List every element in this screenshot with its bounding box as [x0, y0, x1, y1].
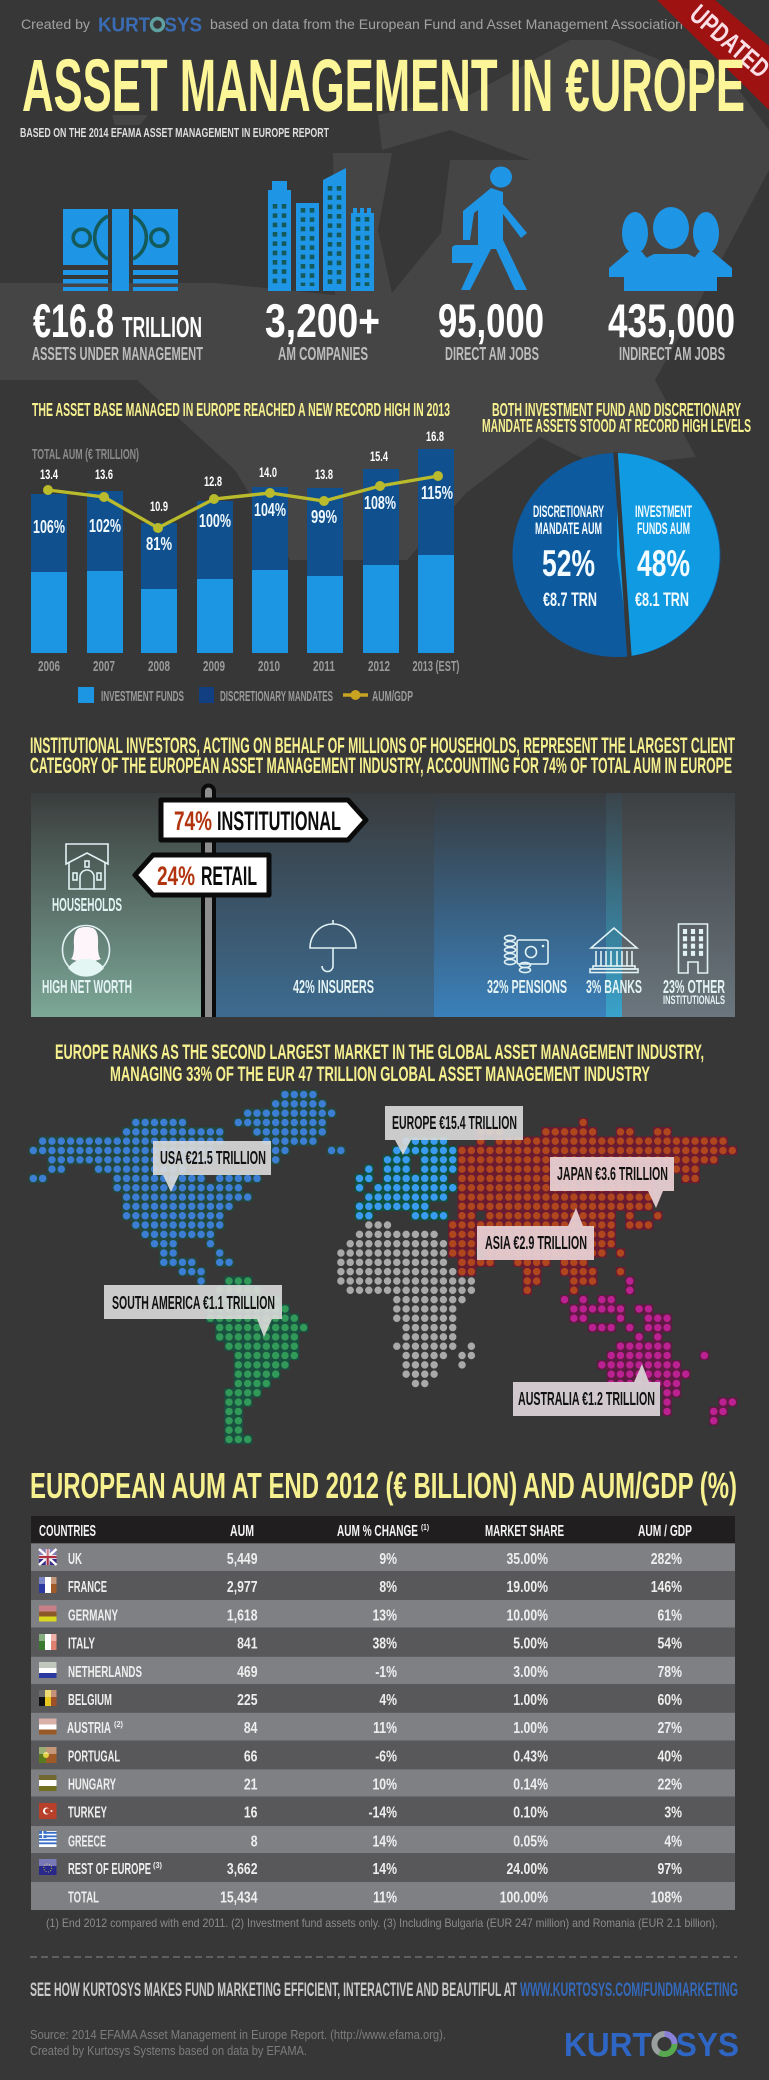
value labels: 16.8 — [426, 428, 444, 444]
top credit line: Created by — [21, 17, 90, 32]
column: market share: 1.00% — [513, 1691, 549, 1708]
sign: retail: 24% — [157, 861, 195, 891]
country names: REST OF EUROPE — [68, 1861, 151, 1878]
AUM/GDP percentages: 115% — [421, 483, 453, 503]
callout: Australia: AUSTRALIA €1.2 TRILLION — [518, 1389, 655, 1409]
AUM/GDP percentages: 108% — [364, 493, 396, 513]
column: AUM % change: 13% — [373, 1606, 398, 1624]
callout: South America — [104, 1285, 282, 1337]
column: AUM % change: -14% — [368, 1803, 398, 1821]
table header: MARKET SHARE — [485, 1523, 564, 1540]
callout: South America: SOUTH AMERICA €1.1 TRILLION — [112, 1293, 275, 1313]
column: market share: 0.43% — [513, 1747, 549, 1765]
label: other institutionals: INSTITUTIONALS — [663, 993, 725, 1007]
country names: FRANCE — [68, 1579, 107, 1596]
heading: record high: THE ASSET BASE MANAGED IN EUROPE REACHED A NEW RECORD HIGH IN 2013 — [32, 400, 450, 420]
legend — [78, 687, 413, 705]
icon: office tower — [678, 924, 708, 973]
column: AUM / GDP: 3% — [664, 1803, 683, 1821]
AUM/GDP percentages: 100% — [199, 511, 231, 531]
year axis: 2011 — [313, 658, 335, 675]
callout: Japan — [550, 1157, 674, 1208]
stat: indirect jobs — [608, 207, 735, 364]
column: AUM: 841 — [237, 1634, 258, 1652]
value labels: 12.8 — [204, 473, 222, 489]
AUM/GDP percentages — [33, 483, 453, 554]
slice label: investment funds: FUNDS AUM — [637, 520, 690, 538]
column: AUM: 1,618 — [227, 1606, 258, 1624]
heading: institutional investors — [30, 733, 735, 778]
column: market share: 1.00% — [513, 1719, 549, 1736]
value labels: 13.6 — [95, 466, 113, 482]
top credit line: based on data from the European Fund and Asset Management Association — [210, 17, 683, 32]
column: market share: 19.00% — [507, 1578, 549, 1595]
subtitle: BASED ON THE 2014 EFAMA ASSET MANAGEMENT IN EUROPE REPORT — [20, 125, 329, 140]
stat: assets under management: €16.8 — [33, 294, 114, 347]
column: AUM: 3,662 — [227, 1860, 258, 1877]
country names: ITALY — [68, 1636, 95, 1652]
country names: BELGIUM — [68, 1692, 112, 1709]
column: AUM: 2,977 — [227, 1578, 258, 1595]
column: AUM: 16 — [244, 1803, 258, 1821]
country names: (2) — [114, 1720, 123, 1729]
stat: assets under management: ASSETS UNDER MANAGEMENT — [32, 344, 203, 364]
label: banks: 3% BANKS — [586, 977, 642, 997]
sign: institutional: INSTITUTIONAL — [217, 806, 341, 836]
column: market share: 0.10% — [513, 1803, 549, 1821]
column: AUM: 8 — [251, 1832, 258, 1850]
slice label: investment funds: 48% — [637, 543, 690, 584]
flag: Europe — [39, 1859, 56, 1875]
background map of Europe — [0, 40, 769, 560]
column: AUM / GDP: 22% — [658, 1775, 683, 1793]
column: AUM % change: -6% — [375, 1747, 398, 1765]
column: AUM % change: 14% — [373, 1860, 398, 1877]
column: market share: 0.05% — [513, 1832, 549, 1850]
flag: Italy — [39, 1634, 56, 1650]
pie chart: mandates vs funds — [512, 452, 720, 658]
icon: pensions — [504, 935, 548, 973]
slice label: discretionary: 52% — [542, 543, 595, 584]
logo: Kurtosys large: KURTOSYS — [564, 2026, 739, 2063]
source — [30, 2028, 446, 2058]
heading: both assets — [482, 400, 751, 436]
column: market share: 10.00% — [507, 1606, 549, 1624]
country names: PORTUGAL — [68, 1748, 120, 1766]
column: AUM: 469 — [237, 1663, 258, 1680]
sign: retail: RETAIL — [201, 861, 257, 891]
callout: Europe: EUROPE €15.4 TRILLION — [392, 1113, 517, 1133]
column: AUM / GDP: 61% — [658, 1606, 683, 1624]
column: AUM % change: 10% — [373, 1775, 398, 1793]
flag: Portugal — [39, 1747, 56, 1763]
column: AUM / GDP: 78% — [658, 1663, 683, 1680]
year axis: 2007 — [93, 658, 115, 675]
table header: AUM % CHANGE — [337, 1523, 418, 1540]
value labels: 13.8 — [315, 466, 333, 482]
column: AUM / GDP: 97% — [658, 1860, 683, 1877]
AUM/GDP percentages: 81% — [146, 534, 172, 554]
year axis: 2006 — [38, 658, 60, 675]
icon: walking person with briefcase — [452, 166, 527, 290]
stat: AM companies: 3,200+ — [265, 294, 380, 347]
column: AUM: 21 — [244, 1775, 258, 1793]
country names: NETHERLANDS — [68, 1664, 142, 1681]
column: AUM % change: -1% — [375, 1663, 398, 1680]
value labels: 13.4 — [40, 466, 58, 482]
slice label: investment funds — [635, 503, 692, 611]
flag: Turkey — [39, 1803, 56, 1819]
year axis — [38, 658, 460, 675]
country names: UK — [68, 1551, 83, 1568]
column: market share: 0.14% — [513, 1775, 549, 1793]
column: AUM % change: 9% — [379, 1550, 398, 1567]
table row backgrounds — [31, 1543, 735, 1910]
column: AUM: 15,434 — [220, 1888, 258, 1906]
icon: high net worth person — [62, 926, 110, 977]
column: AUM: 5,449 — [227, 1550, 258, 1567]
slice label: discretionary: DISCRETIONARY — [533, 503, 604, 521]
label: other institutionals — [663, 977, 725, 1007]
flag: Netherlands — [39, 1662, 56, 1678]
column: AUM: 225 — [237, 1691, 258, 1708]
stat: direct jobs: 95,000 — [438, 294, 544, 347]
source: Created by Kurtosys Systems based on data by EFAMA. — [30, 2044, 307, 2058]
panel: client categories — [31, 784, 735, 1017]
flag: Belgium — [39, 1690, 56, 1706]
country names: GREECE — [68, 1834, 106, 1850]
slice label: investment funds: €8.1 TRN — [635, 590, 689, 611]
table header — [31, 1516, 735, 1544]
column: AUM / GDP: 4% — [664, 1832, 683, 1850]
column: AUM % change — [368, 1550, 398, 1906]
flag: France — [39, 1577, 56, 1593]
signpost pole — [201, 784, 216, 1017]
column: market share: 3.00% — [513, 1663, 549, 1680]
column: AUM % change: 38% — [373, 1634, 398, 1652]
country names: TURKEY — [68, 1804, 107, 1822]
country names: TOTAL — [68, 1890, 99, 1906]
slice label: investment funds: INVESTMENT — [635, 503, 692, 521]
column: AUM / GDP: 54% — [658, 1634, 683, 1652]
table header: AUM — [230, 1523, 254, 1540]
column: AUM / GDP — [651, 1550, 683, 1906]
stat: AM companies — [265, 168, 380, 364]
bars: investment funds — [31, 555, 454, 653]
top credit line — [21, 14, 683, 36]
dots — [33, 1095, 732, 1439]
stat: direct jobs: DIRECT AM JOBS — [445, 344, 539, 364]
label: households: HOUSEHOLDS — [52, 895, 122, 915]
year axis: 2013 (EST) — [412, 658, 460, 675]
column: AUM / GDP: 146% — [651, 1578, 683, 1595]
sign: institutional — [161, 800, 366, 840]
callout: USA — [153, 1141, 271, 1192]
AUM/GDP percentages: 102% — [89, 516, 121, 536]
icon: house — [66, 844, 108, 889]
callout: Europe — [385, 1106, 523, 1155]
column: AUM / GDP: 40% — [658, 1747, 683, 1765]
bar chart: total AUM — [31, 428, 460, 705]
sign: institutional: 74% — [174, 806, 212, 836]
flag: Austria — [39, 1718, 56, 1734]
column: market share: 24.00% — [507, 1860, 549, 1877]
region tint blocks — [33, 1095, 732, 1439]
column: AUM % change: 14% — [373, 1832, 398, 1850]
column: AUM / GDP: 108% — [651, 1888, 683, 1906]
column: AUM % change: 11% — [373, 1719, 398, 1736]
flag: UK — [39, 1549, 56, 1565]
column: AUM / GDP: 27% — [658, 1719, 683, 1736]
slice label: discretionary: €8.7 TRN — [543, 590, 597, 611]
bars: discretionary mandates — [31, 449, 454, 589]
value labels: 15.4 — [370, 448, 388, 464]
source: Source: 2014 EFAMA Asset Management in Europe Report. (http://www.efama.org). — [30, 2028, 446, 2042]
country names — [67, 1551, 162, 1906]
column: market share: 5.00% — [513, 1634, 549, 1652]
stat: AM companies: AM COMPANIES — [278, 344, 368, 364]
icon: umbrella — [310, 920, 356, 972]
table header: COUNTRIES — [39, 1523, 96, 1540]
year axis: 2010 — [258, 658, 280, 675]
stat: direct jobs — [438, 166, 544, 364]
column: AUM: 84 — [244, 1719, 258, 1736]
AUM/GDP line — [43, 471, 443, 533]
column: market share: 35.00% — [507, 1550, 549, 1567]
table: European AUM — [31, 1516, 735, 1910]
label: insurers: 42% INSURERS — [293, 977, 374, 997]
column: AUM % change: 11% — [373, 1888, 398, 1906]
legend: DISCRETIONARY MANDATES — [220, 688, 333, 705]
column: AUM: 66 — [244, 1747, 258, 1765]
country names: GERMANY — [68, 1608, 118, 1624]
column: AUM / GDP: 60% — [658, 1691, 683, 1708]
AUM/GDP percentages: 104% — [254, 500, 286, 520]
label: high net worth: HIGH NET WORTH — [42, 977, 132, 997]
year axis: 2008 — [148, 658, 170, 675]
callout: Asia — [477, 1208, 594, 1260]
flag: Greece — [39, 1831, 56, 1847]
label: pensions: 32% PENSIONS — [487, 977, 567, 997]
year axis: 2012 — [368, 658, 390, 675]
column: market share: 100.00% — [500, 1888, 549, 1906]
AUM/GDP percentages: 106% — [33, 517, 65, 537]
legend: AUM/GDP — [372, 688, 413, 705]
country names: (3) — [153, 1861, 162, 1870]
icon: buildings — [268, 168, 374, 291]
callout: Australia — [513, 1364, 660, 1416]
table header: (1) — [421, 1523, 429, 1532]
country names: HUNGARY — [68, 1776, 116, 1794]
value labels: 14.0 — [259, 464, 277, 480]
year axis: 2009 — [203, 658, 225, 675]
column: AUM — [220, 1550, 258, 1906]
callout: USA: USA €21.5 TRILLION — [160, 1148, 266, 1168]
logo: Kurtosys small: KURTOSYS — [98, 14, 202, 36]
dot world map — [33, 1095, 732, 1439]
icon: bank — [590, 928, 638, 972]
table header: AUM / GDP — [638, 1523, 692, 1540]
stat: assets under management — [32, 209, 203, 364]
slice label: discretionary — [533, 503, 604, 611]
sign: retail — [135, 855, 269, 895]
country names: AUSTRIA — [67, 1720, 111, 1737]
flag: Hungary — [39, 1775, 56, 1791]
column: AUM / GDP: 282% — [651, 1550, 683, 1567]
stat: assets under management: TRILLION — [122, 312, 202, 344]
column: AUM % change: 4% — [379, 1691, 398, 1708]
column: market share — [500, 1550, 549, 1906]
legend: INVESTMENT FUNDS — [101, 688, 184, 705]
callout: Asia: ASIA €2.9 TRILLION — [485, 1233, 587, 1253]
heading: global market — [55, 1041, 704, 1086]
icon: banknotes — [63, 209, 178, 291]
axis title: TOTAL AUM (€ TRILLION) — [32, 446, 139, 463]
AUM/GDP percentages: 99% — [311, 507, 337, 527]
column: AUM % change: 8% — [379, 1578, 398, 1595]
icon: group of people — [609, 207, 732, 291]
slice label: discretionary: MANDATE AUM — [535, 520, 602, 538]
callout: Japan: JAPAN €3.6 TRILLION — [557, 1164, 668, 1184]
value labels — [40, 428, 444, 514]
flag: Germany — [39, 1606, 56, 1622]
value labels: 10.9 — [150, 498, 168, 514]
label: other institutionals: 23% OTHER — [663, 977, 725, 997]
